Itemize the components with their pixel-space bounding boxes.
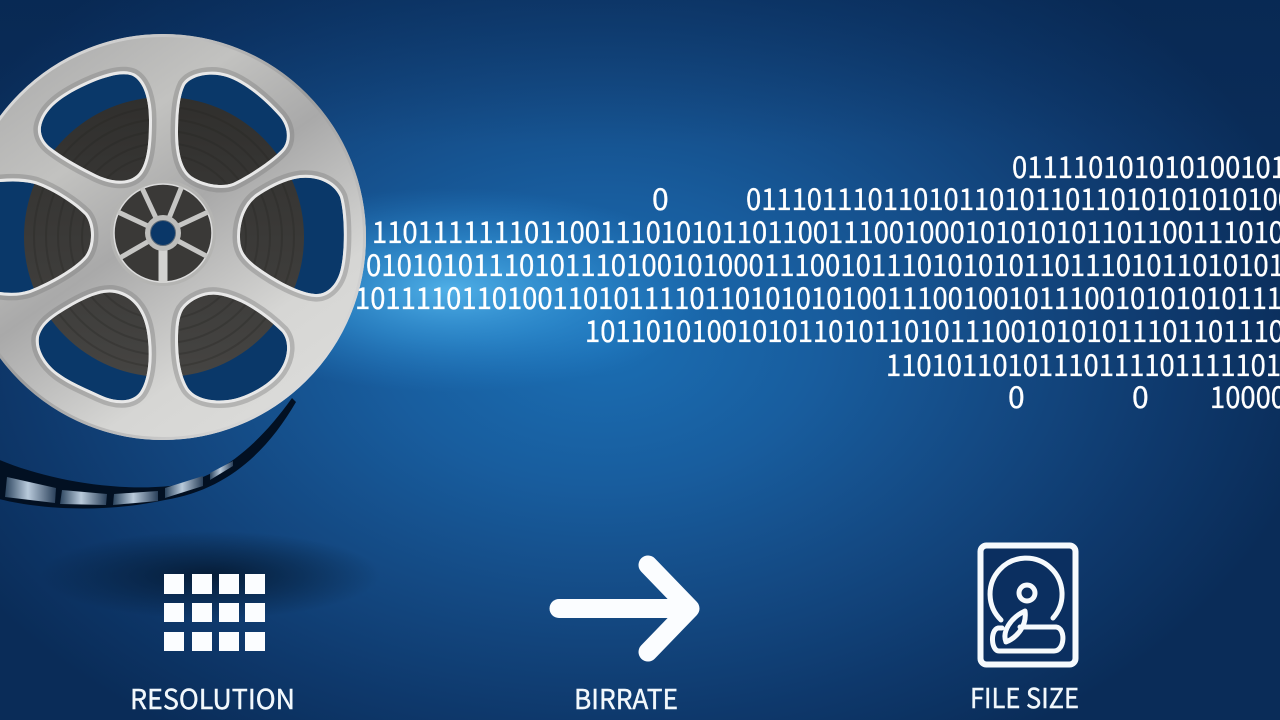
light beam glow (185, 188, 715, 392)
reel hub (110, 180, 216, 286)
binary data stream: 0 (652, 175, 669, 219)
bitrate block (559, 565, 690, 717)
label: resolution: RESOLUTION (130, 678, 295, 717)
wound film tape (24, 97, 304, 377)
binary data stream (355, 143, 1280, 417)
label: bitrate: BIRRATE (574, 678, 678, 717)
icon: hard drive (980, 546, 1076, 664)
resolution block (130, 574, 295, 717)
icon: arrow (559, 565, 690, 652)
reel window bevels (0, 74, 344, 400)
film reel (0, 34, 366, 440)
label: file size: FILE SIZE (970, 677, 1079, 716)
binary data stream: 0 (1008, 373, 1025, 417)
film strip trailing from reel (0, 398, 296, 508)
icon: pixel grid (164, 574, 265, 651)
silver reel plate (0, 34, 366, 440)
binary data stream: 0 (1132, 373, 1149, 417)
file size block (970, 546, 1079, 716)
